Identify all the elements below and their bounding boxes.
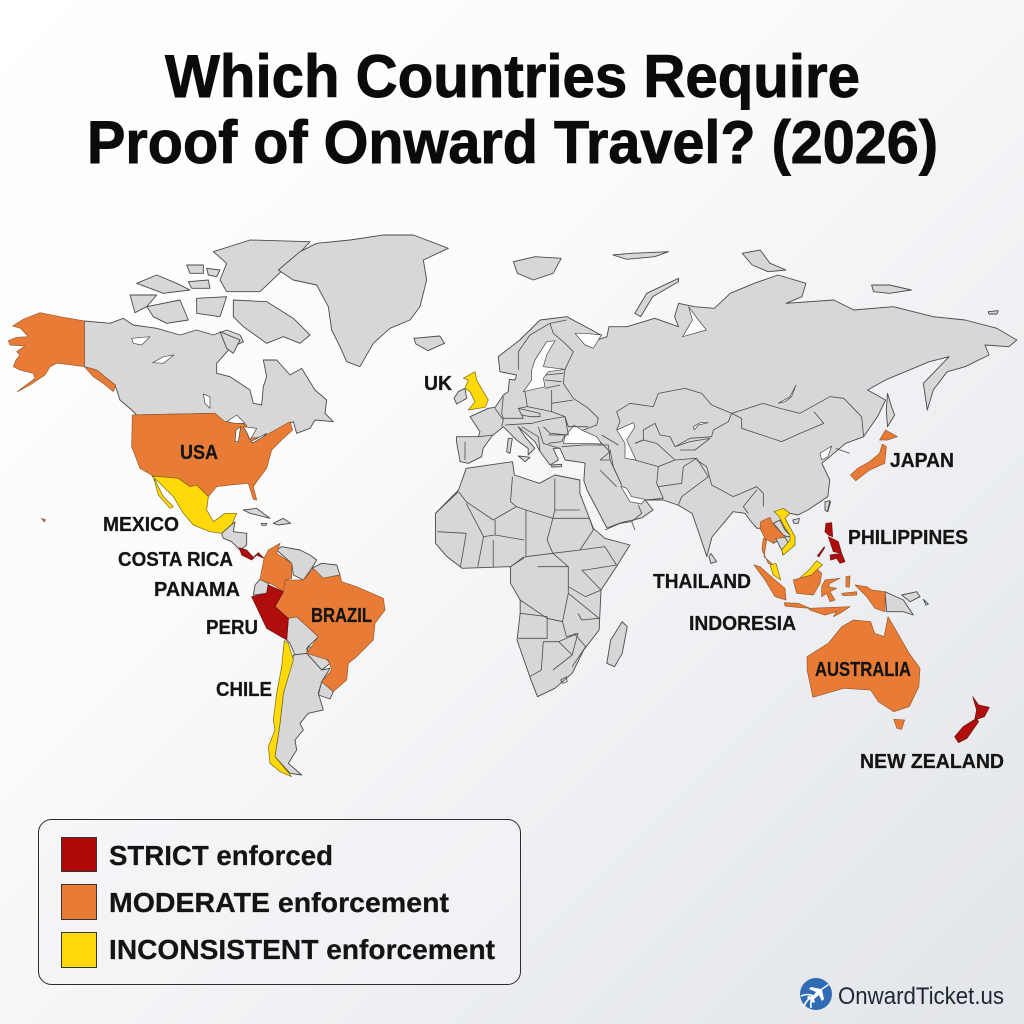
Greenland	[278, 235, 448, 367]
Peru, strict	[252, 585, 288, 640]
country labels: COSTA RICA	[118, 549, 233, 571]
country labels: CHILE	[216, 679, 272, 701]
country labels: AUSTRALIA	[815, 659, 911, 681]
Indonesia, moderate	[754, 565, 885, 617]
country labels: PANAMA	[154, 579, 240, 601]
country labels: PHILIPPINES	[848, 527, 968, 549]
Thailand, moderate	[760, 517, 785, 565]
country labels	[103, 373, 1004, 773]
region: Southeast Asia	[754, 501, 928, 617]
Costa Rica and Panama, strict	[239, 548, 264, 560]
title	[87, 43, 938, 176]
Australia, moderate	[807, 617, 920, 729]
country labels: NEW ZEALAND	[860, 751, 1004, 773]
region: Europe	[454, 320, 618, 467]
region: Eurasia	[414, 250, 1017, 557]
Mexico, inconsistent	[152, 476, 237, 533]
country labels: JAPAN	[890, 450, 954, 472]
USA, moderate	[132, 413, 293, 500]
Central America and Caribbean	[222, 508, 291, 550]
Great Lakes	[227, 415, 267, 443]
Chile, inconsistent	[268, 641, 293, 777]
country labels: UK	[424, 373, 453, 395]
icon: plane in circle	[800, 978, 832, 1010]
title: Which Countries Require	[165, 43, 860, 110]
title: Proof of Onward Travel? (2026)	[87, 109, 938, 176]
country labels: INDORESIA	[689, 613, 796, 635]
east Asia borders	[800, 397, 864, 453]
country labels: THAILAND	[653, 571, 751, 593]
Canadian lakes	[132, 337, 210, 408]
brand logo: OnwardTicket.us	[838, 983, 1004, 1010]
Europe borders	[465, 320, 618, 460]
Brazil, moderate	[275, 568, 385, 692]
legend item: strict: STRICT enforced	[109, 840, 333, 871]
Africa	[435, 462, 717, 697]
Philippines, strict	[817, 523, 845, 563]
Japan, moderate	[850, 430, 897, 481]
brand logo	[800, 978, 1004, 1010]
country labels: MEXICO	[103, 514, 179, 536]
Alaska, moderate	[8, 313, 116, 392]
region: North America	[8, 235, 448, 533]
Canada and Arctic islands	[84, 240, 333, 442]
Eurasia landmass	[414, 250, 1017, 557]
Baltic, Black Sea and White Sea	[523, 333, 602, 444]
Africa borders	[435, 477, 616, 683]
Colombia, moderate	[260, 543, 292, 592]
New Zealand, strict	[955, 697, 989, 743]
country labels: BRAZIL	[311, 605, 372, 627]
legend item: moderate: MODERATE enforcement	[109, 887, 449, 918]
Europe islands	[454, 388, 562, 467]
country labels: USA	[180, 442, 218, 464]
Laos, Cambodia, Taiwan, Hainan, Papua New Guinea	[773, 501, 928, 615]
Hawaii	[42, 518, 46, 522]
Asia borders	[600, 388, 800, 530]
world map	[8, 235, 1017, 777]
Vietnam and Malaysia, inconsistent	[770, 508, 823, 580]
country labels: PERU	[206, 617, 258, 639]
legend	[38, 820, 520, 984]
region: Central Asia and Middle East	[600, 385, 800, 530]
South America neutral countries	[253, 547, 340, 775]
east Asia inland waters	[683, 307, 832, 460]
region: Africa and Oceania	[435, 462, 989, 743]
UK, inconsistent	[463, 372, 488, 410]
region: Central and South America	[222, 508, 385, 777]
legend item: inconsistent: INCONSISTENT enforcement	[109, 934, 495, 965]
inland waters	[617, 385, 796, 504]
